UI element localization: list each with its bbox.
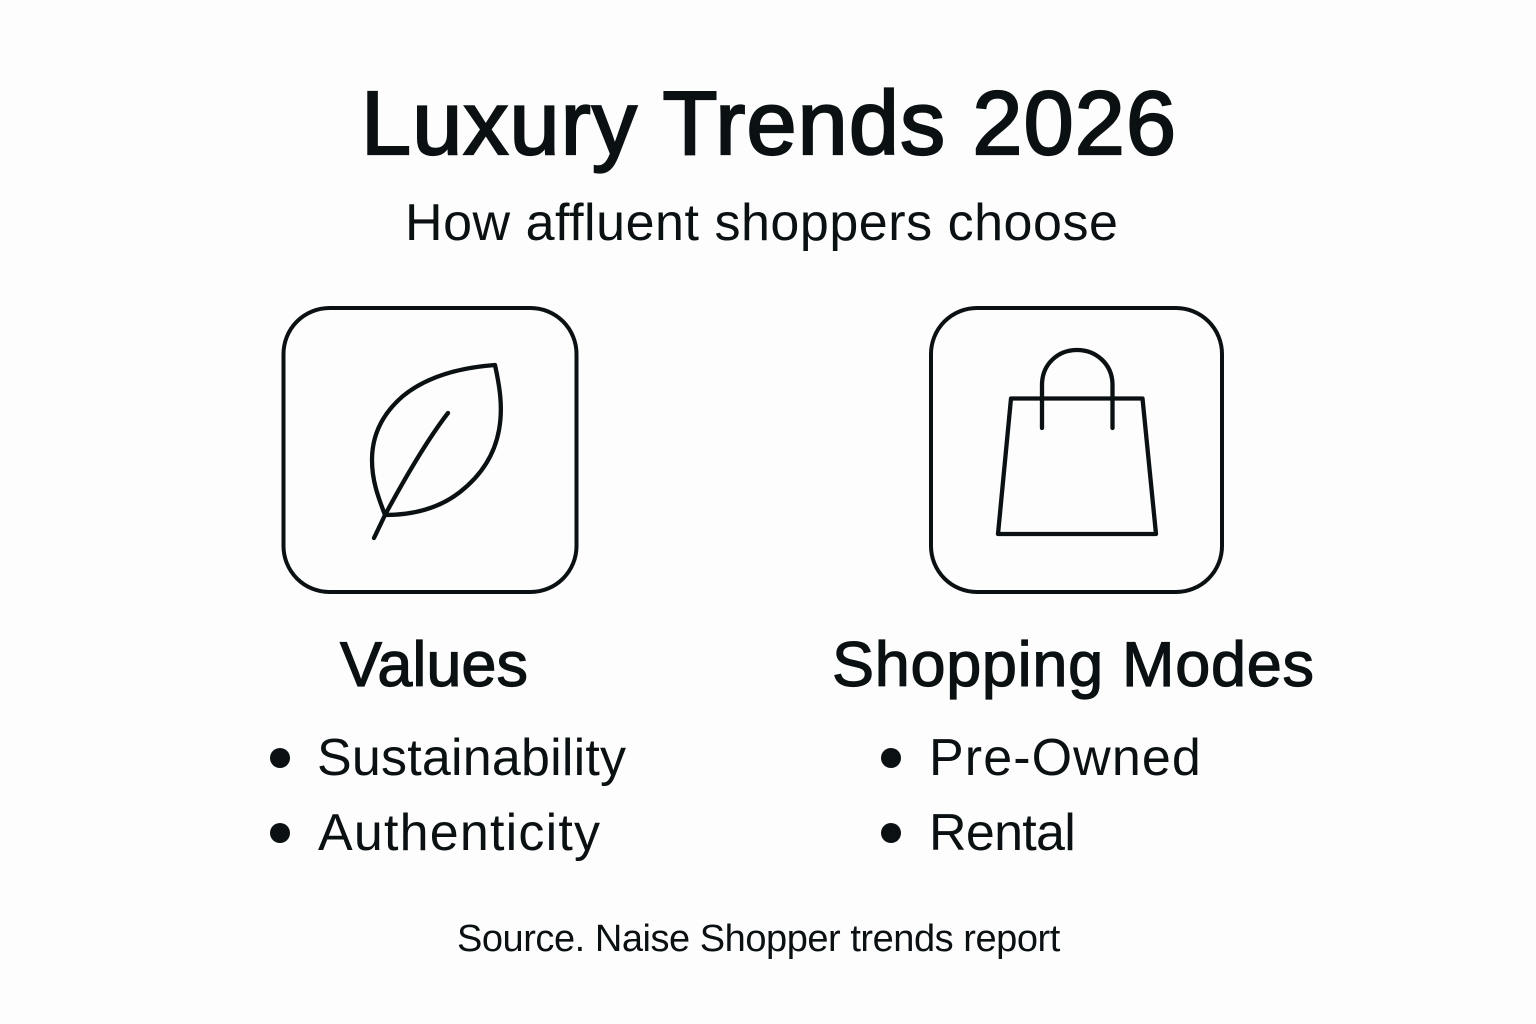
title: Luxury Trends 2026: [361, 74, 1177, 174]
subtitle: How affluent shoppers choose: [405, 194, 1118, 252]
bullet: Sustainability: Sustainability: [317, 729, 626, 787]
bullet: Rental: Rental: [929, 804, 1075, 862]
heading: Values: Values: [340, 630, 528, 700]
source note: Source. Naise Shopper trends report: [457, 918, 1060, 960]
list: shopping modes: [881, 729, 1202, 862]
heading: Shopping Modes: Shopping Modes: [832, 630, 1315, 700]
list: values: [270, 729, 626, 862]
bullet: Pre-Owned: Pre-Owned: [929, 729, 1202, 787]
bullet: Authenticity: Authenticity: [318, 804, 601, 862]
icon: shopping bag in rounded square: [929, 306, 1224, 594]
icon: leaf in rounded square: [282, 306, 578, 594]
